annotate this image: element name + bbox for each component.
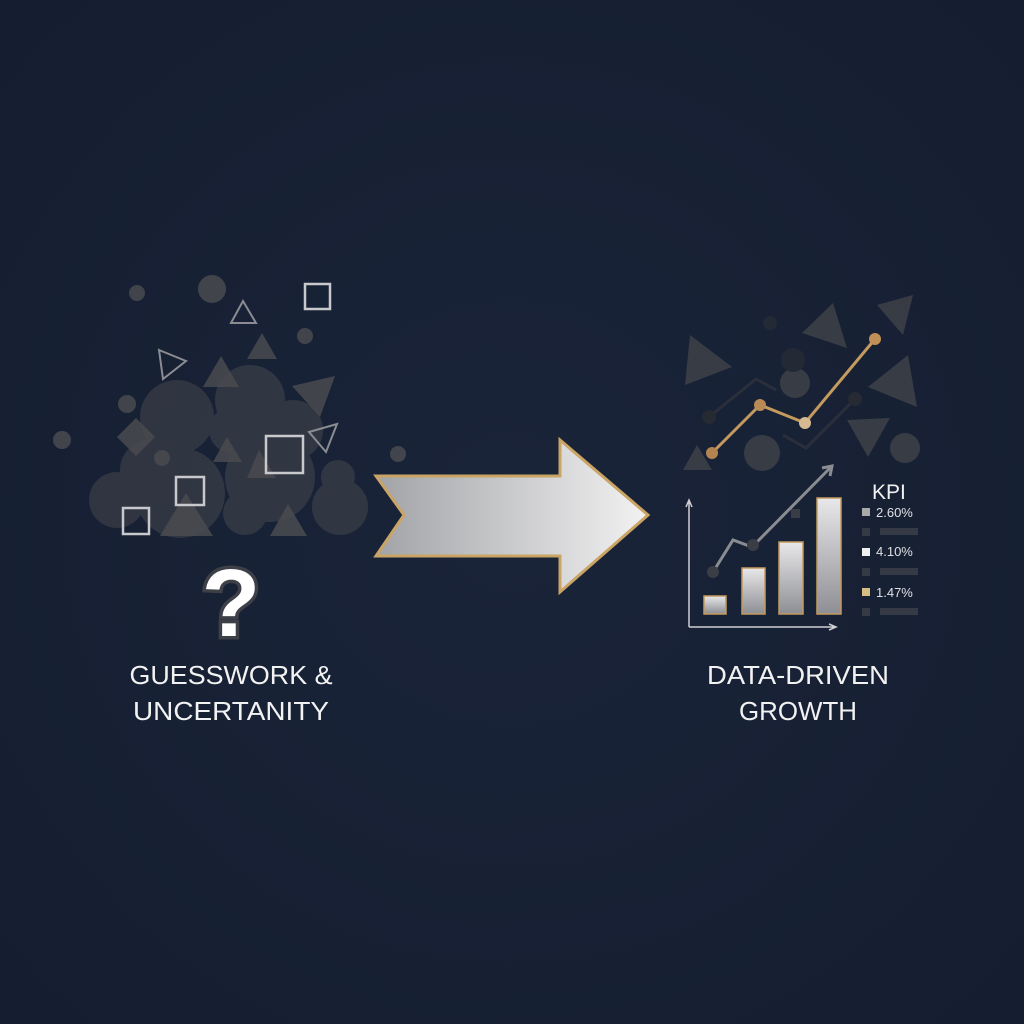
legend: KPI: 1.47% <box>876 585 913 600</box>
legend: KPI: KPI <box>872 481 906 504</box>
legend: KPI <box>862 481 918 616</box>
cluster: guesswork shapes <box>53 275 406 538</box>
legend: KPI: 4.10% <box>876 544 913 559</box>
heading: guesswork: GUESSWORK & <box>130 660 332 690</box>
heading: guesswork <box>130 660 332 726</box>
chart: bar chart <box>686 466 841 630</box>
heading: data-driven growth: DATA-DRIVEN <box>707 660 889 690</box>
legend: KPI: 2.60% <box>876 505 913 520</box>
heading: data-driven growth: GROWTH <box>739 696 857 726</box>
chart: growth line with shapes <box>683 295 920 471</box>
arrow <box>376 440 648 592</box>
icon: question mark: ? <box>202 550 260 657</box>
heading: guesswork: UNCERTANITY <box>133 696 329 726</box>
heading: data-driven growth <box>707 660 889 726</box>
